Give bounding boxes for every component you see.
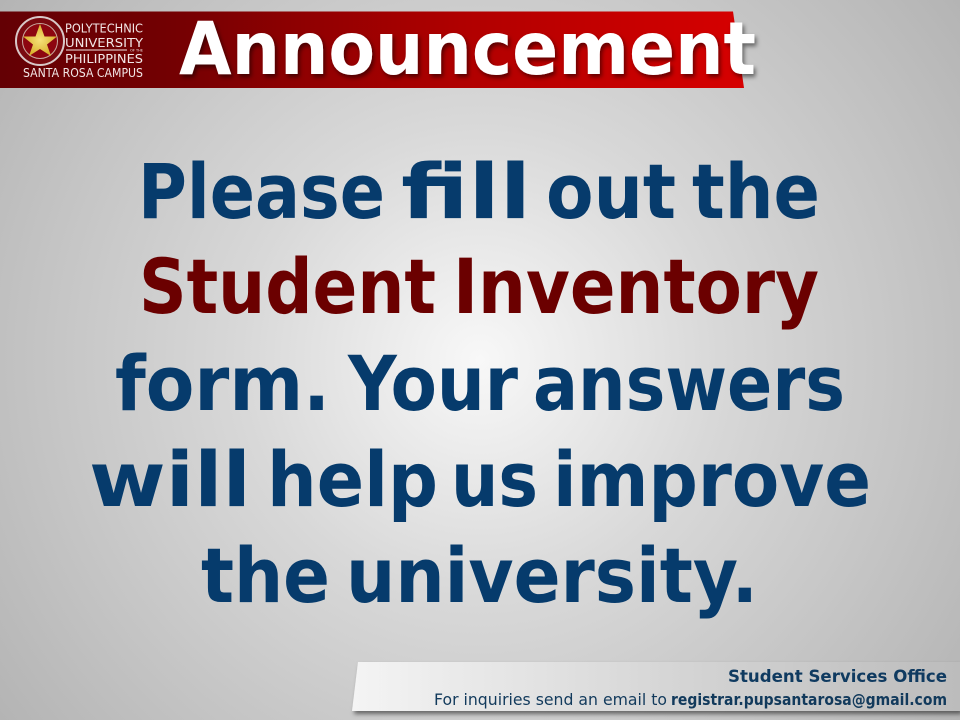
main message: answers: [533, 339, 845, 428]
main message: us: [451, 435, 538, 524]
logo text: POLYTECHNIC: [65, 22, 143, 36]
footer bar: [352, 662, 960, 711]
footer contact line: [434, 690, 947, 709]
main message: improve: [553, 435, 871, 524]
main message: Your: [347, 339, 518, 428]
main message: university.: [346, 531, 758, 620]
footer contact line: For inquiries send an email to: [434, 690, 667, 709]
main message: Please: [138, 147, 385, 236]
logo text: [23, 22, 144, 80]
main message: out: [546, 147, 676, 236]
logo text: SANTA ROSA CAMPUS: [23, 66, 143, 80]
main message: Student: [139, 242, 436, 331]
logo text: PHILIPPINES: [65, 52, 143, 66]
logo text: UNIVERSITY: [65, 36, 144, 50]
main message: the: [692, 147, 820, 236]
logo text: OF THE: [130, 48, 143, 52]
main message: [89, 147, 871, 620]
footer heading: Student Services Office: [728, 667, 947, 687]
main message: fill: [401, 147, 531, 236]
main message: help: [267, 435, 438, 524]
main message: Inventory: [453, 242, 819, 331]
main message: will: [89, 435, 251, 524]
banner title: Announcement: [179, 7, 756, 92]
header banner: [0, 7, 756, 92]
main message: form.: [115, 339, 330, 428]
logo: university seal: [16, 17, 64, 65]
main message: the: [201, 531, 330, 620]
